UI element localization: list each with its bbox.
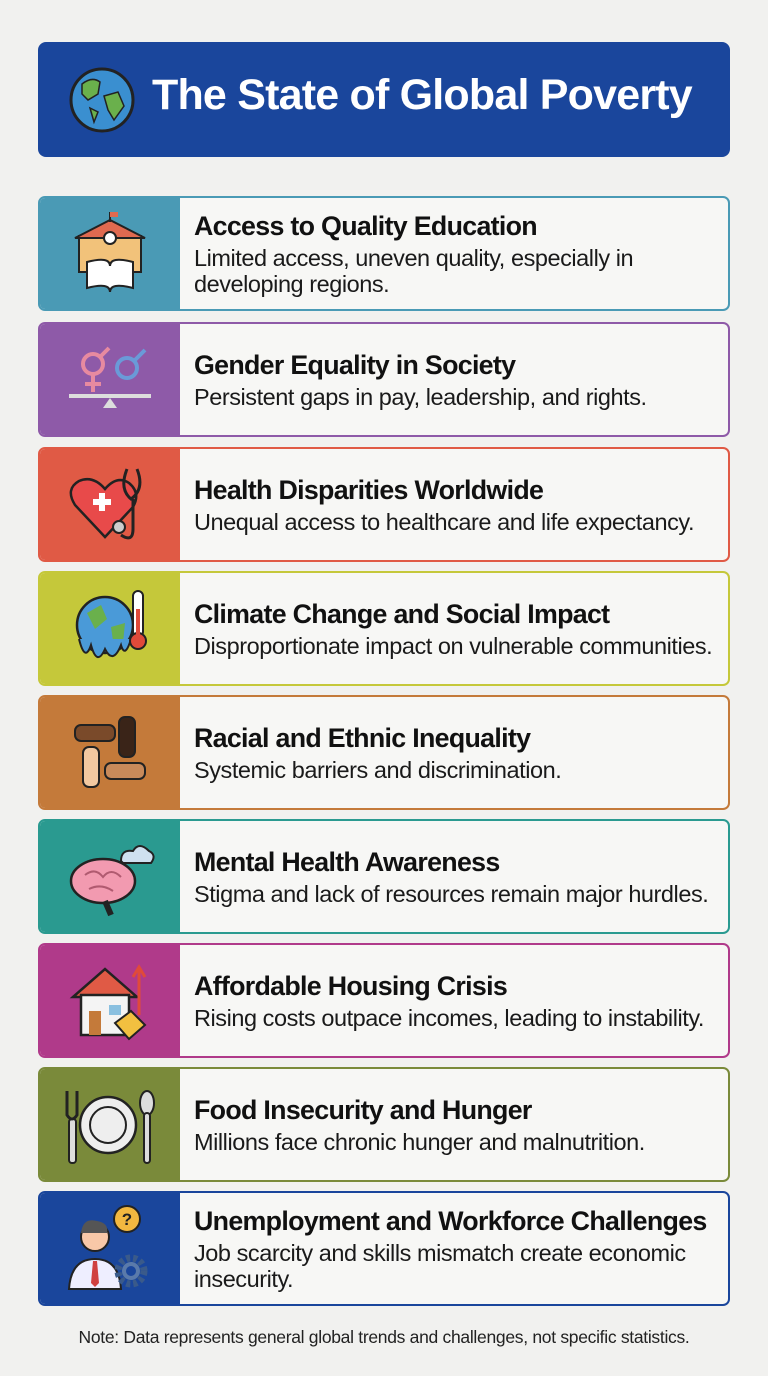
card: food: Food Insecurity and Hunger <box>194 1094 532 1124</box>
card: gender: Gender Equality in Society <box>194 350 515 380</box>
card: unemployment: Job scarcity and skills mismatch create economic insecurity. <box>194 1240 686 1292</box>
card: education <box>38 196 730 311</box>
card: racial: Racial and Ethnic Inequality <box>194 722 530 752</box>
card: food: Millions face chronic hunger and malnutrition. <box>194 1128 645 1154</box>
card: housing <box>38 943 730 1058</box>
icon: gender scale <box>69 346 151 408</box>
icon: heart stethoscope <box>70 468 142 540</box>
card: housing: Rising costs outpace incomes, leading to instability. <box>194 1004 704 1030</box>
card: health <box>38 447 730 562</box>
card: racial <box>38 695 730 810</box>
card: food <box>38 1067 730 1182</box>
title: The State of Global Poverty <box>152 71 692 119</box>
card: mental health: Mental Health Awareness <box>194 846 500 876</box>
icon: worker question gear: ? <box>122 1210 132 1229</box>
card: health: Health Disparities Worldwide <box>194 474 543 504</box>
card: health: Unequal access to healthcare and life expectancy. <box>194 508 694 534</box>
card: gender: Persistent gaps in pay, leadership, and rights. <box>194 384 647 410</box>
card: climate: Climate Change and Social Impact <box>194 598 609 628</box>
card: climate: Disproportionate impact on vulnerable communities. <box>194 632 712 658</box>
card: racial: Systemic barriers and discrimination. <box>194 756 561 782</box>
card: climate <box>38 571 730 686</box>
icon: joined hands <box>74 716 146 788</box>
card: unemployment <box>38 1191 730 1306</box>
icon: worker question gear <box>68 1205 148 1290</box>
icon: melting globe thermometer <box>76 590 147 658</box>
title <box>38 42 730 157</box>
icon: globe <box>70 68 134 132</box>
card: gender <box>38 322 730 437</box>
icon: plate and cutlery <box>66 1090 155 1164</box>
card: mental health <box>38 819 730 934</box>
icon: school <box>74 212 146 292</box>
card: unemployment: Unemployment and Workforce Challenges <box>194 1206 707 1236</box>
card: mental health: Stigma and lack of resources remain major hurdles. <box>194 880 708 906</box>
note: Note: Data represents general global trends and challenges, not specific statistics. <box>78 1327 690 1347</box>
icon: brain cloud <box>70 845 155 916</box>
icon: house price tag <box>70 964 146 1040</box>
card: education: Limited access, uneven quality, especially in developing regions. <box>194 244 633 296</box>
card: housing: Affordable Housing Crisis <box>194 970 507 1000</box>
card: education: Access to Quality Education <box>194 210 537 240</box>
